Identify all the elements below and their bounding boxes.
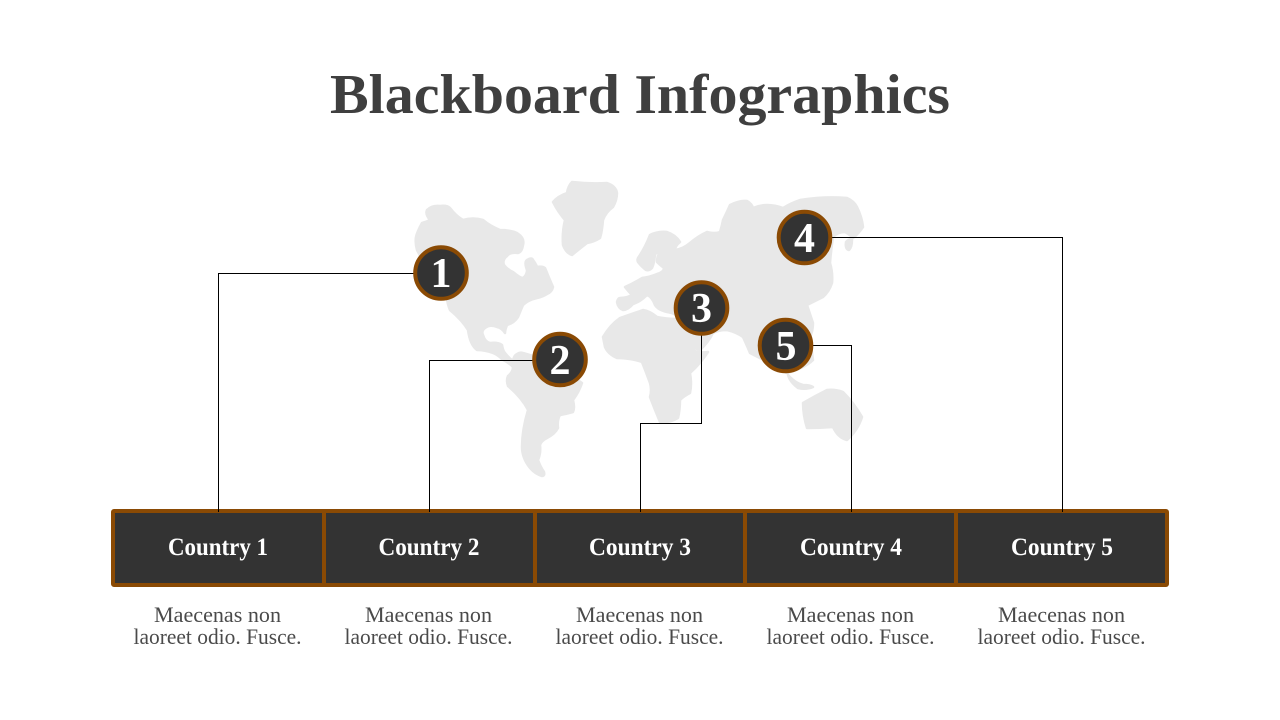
country label 3: Country 3 [589,534,691,561]
description 1: laoreet odio. Fusce. [134,624,302,649]
description 4: laoreet odio. Fusce. [766,624,934,649]
marker 2: 2 [550,338,570,384]
greenland [553,182,617,255]
description 3 [556,602,724,649]
description 5: Maecenas non [998,602,1125,627]
marker 5: 5 [776,324,796,370]
marker 4: 4 [794,216,815,262]
description 1 [134,602,302,649]
title: Blackboard Infographics [330,64,950,126]
country label 4: Country 4 [800,534,902,561]
description 4: Maecenas non [787,602,914,627]
description 2: laoreet odio. Fusce. [344,624,512,649]
description 4 [766,602,934,649]
world map [416,182,863,476]
marker 3 [676,282,727,334]
description 3: Maecenas non [576,602,703,627]
marker 1: 1 [430,251,452,297]
australia [803,390,862,440]
description 5: laoreet odio. Fusce. [978,624,1146,649]
marker 3: 3 [691,286,712,332]
marker 2 [534,334,586,385]
eurasia [617,197,863,373]
connector lines [218,238,1062,512]
marker 4 [779,212,830,263]
description 1: Maecenas non [154,602,281,627]
africa [603,310,708,422]
country label 1: Country 1 [168,534,268,561]
description 2: Maecenas non [365,602,492,627]
americas [416,206,582,476]
country label 2: Country 2 [378,534,480,561]
description 2 [344,602,512,649]
islands [788,375,813,389]
country label 5: Country 5 [1011,534,1113,561]
marker 5 [760,320,811,371]
country bar [113,511,1167,585]
description 5 [978,602,1146,649]
marker 1 [415,247,467,299]
description 3: laoreet odio. Fusce. [556,624,724,649]
